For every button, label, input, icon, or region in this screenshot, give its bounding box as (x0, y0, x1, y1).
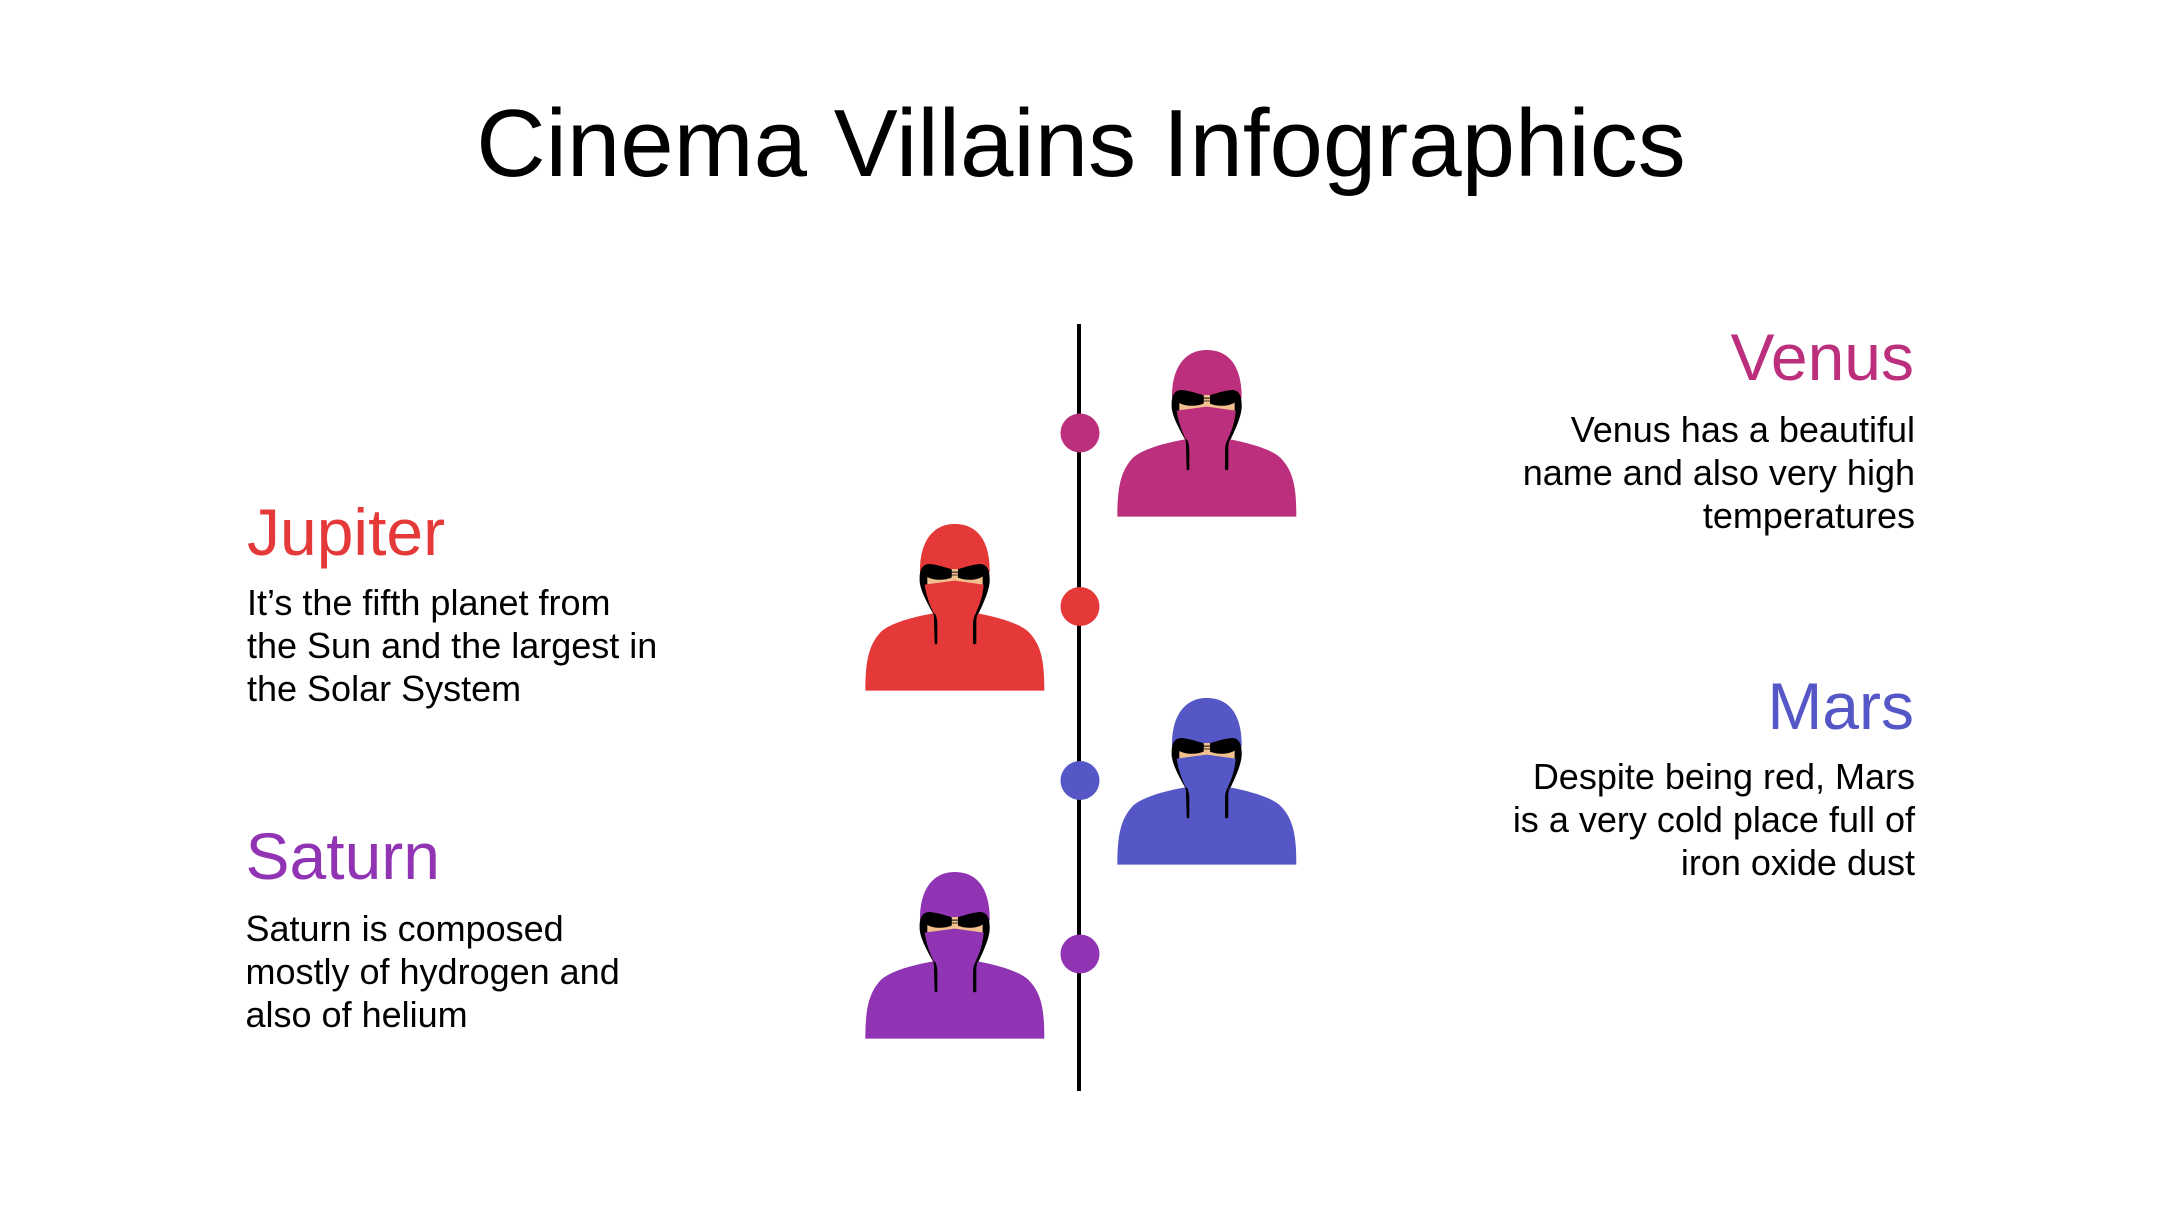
text: Venus description: temperatures (1703, 495, 1915, 536)
timeline dot: Saturn (1060, 934, 1100, 974)
text: Jupiter description: the Sun and the largest in (247, 625, 657, 666)
panel: Saturn (246, 819, 620, 1035)
title: Cinema Villains Infographics (476, 90, 1686, 197)
heading: Saturn: Saturn (246, 819, 440, 893)
text: Mars description: is a very cold place full of (1513, 799, 1916, 840)
text: Venus description: name and also very high (1523, 452, 1915, 493)
text: Saturn description: also of helium (246, 994, 468, 1035)
timeline dot: Mars (1060, 761, 1100, 800)
icon: Venus villain (1117, 350, 1296, 517)
panel: Venus (1523, 320, 1915, 536)
heading: Jupiter: Jupiter (247, 495, 445, 569)
text: Venus description: Venus has a beautiful (1571, 409, 1915, 450)
text: Saturn description: mostly of hydrogen and (246, 951, 620, 992)
heading: Venus: Venus (1730, 320, 1914, 394)
icon: Jupiter villain (865, 524, 1044, 691)
text: Mars description: iron oxide dust (1681, 842, 1915, 883)
icon: Saturn villain (865, 872, 1044, 1039)
panel: Mars (1513, 669, 1916, 883)
timeline dot: Venus (1060, 414, 1100, 452)
heading: Mars: Mars (1767, 669, 1914, 743)
text: Jupiter description: It’s the fifth planet from (247, 582, 611, 623)
panel: Jupiter (247, 495, 657, 709)
text: Mars description: Despite being red, Mars (1533, 756, 1915, 797)
text: Saturn description: Saturn is composed (246, 908, 564, 949)
timeline dot: Jupiter (1060, 587, 1100, 626)
icon: Mars villain (1117, 698, 1296, 865)
text: Jupiter description: the Solar System (247, 668, 521, 709)
timeline axis (1077, 324, 1081, 1091)
